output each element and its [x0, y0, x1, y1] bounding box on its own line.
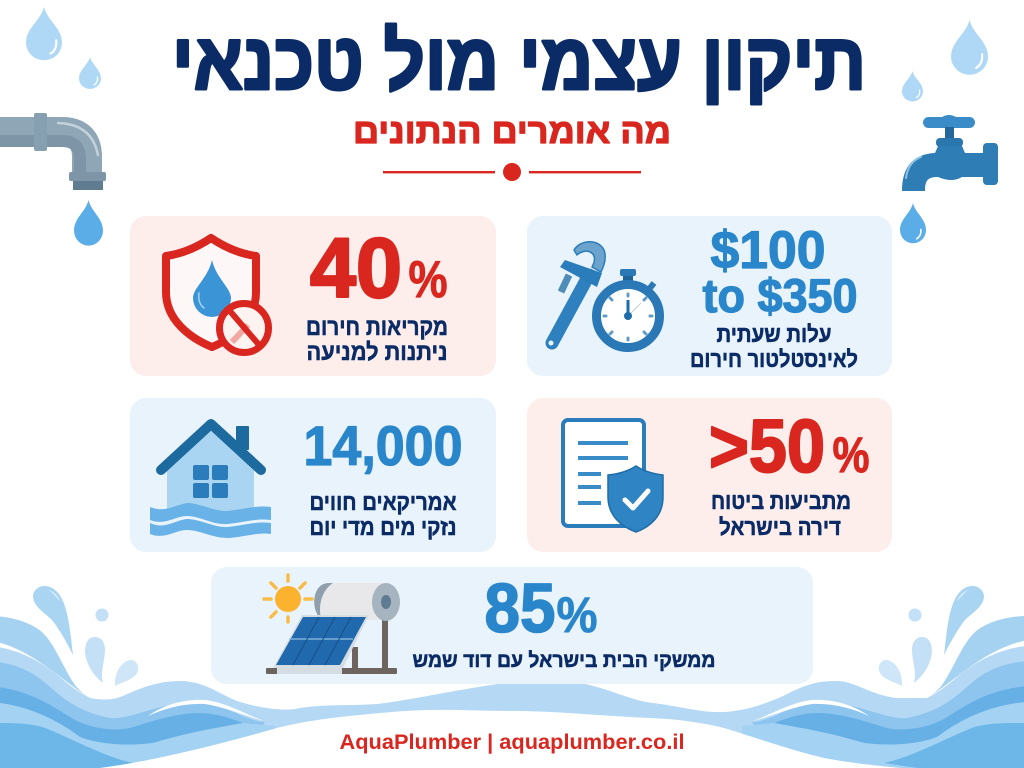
panel: 40% preventable emergency calls — [130, 216, 496, 376]
water waves and splash: right side — [717, 586, 1024, 768]
icon: flooded house — [150, 424, 271, 538]
icon: blue drop left — [74, 200, 103, 246]
icon: small drop left — [79, 57, 101, 89]
icon: shield with drop and prohibition sign — [166, 238, 268, 352]
icon: large drop left — [26, 7, 62, 60]
stat: 14,000: 14,000 — [304, 414, 462, 477]
stat: 40%: 40 — [310, 221, 402, 315]
stat: 40%: % — [408, 251, 448, 309]
label: preventable emergency calls — [306, 314, 448, 366]
stat: 85%: 85 — [484, 569, 556, 647]
label: preventable emergency calls: מקריאות חירום — [306, 314, 448, 341]
label: preventable emergency calls: ניתנות למניעה — [306, 339, 448, 366]
icon: blue drop right — [900, 203, 926, 243]
label: households in Israel with solar heater: ממשקי הבית בישראל עם דוד שמש — [412, 649, 716, 672]
panel: hourly cost of emergency plumber — [527, 216, 892, 376]
icon: small drop right — [902, 71, 923, 101]
subtitle: מה אומרים הנתונים — [353, 112, 671, 151]
water waves and splash: left side — [0, 586, 300, 768]
icon: document with check shield — [563, 420, 663, 532]
panel: 85% of households with solar heater — [211, 567, 813, 684]
icon: pipe wrench and stopwatch — [548, 242, 660, 348]
stat: $100 to $350: $100 — [710, 221, 826, 280]
water wave: centre band — [90, 680, 930, 768]
icon: large drop right — [951, 20, 988, 75]
label: Americans experience water damage daily: אמריקאים חווים — [310, 489, 457, 515]
label: Americans experience water damage daily — [310, 489, 457, 540]
stat: $100 to $350: to $350 — [702, 269, 858, 322]
label: hourly emergency plumber cost — [690, 321, 858, 372]
label: home insurance claims in Israel: מתביעות ביטוח — [711, 488, 851, 514]
stat: $100 to $350 — [702, 221, 858, 322]
stat: 40% — [310, 221, 448, 315]
icon: sun — [264, 575, 312, 622]
label: hourly emergency plumber cost: עלות שעתית — [716, 321, 832, 347]
label: home insurance claims in Israel — [711, 488, 851, 540]
footer brand: AquaPlumber | aquaplumber.co.il — [340, 731, 684, 754]
label: Americans experience water damage daily: נזקי מים מדי יום — [310, 514, 456, 540]
title: תיקון עצמי מול טכנאי — [172, 17, 866, 106]
stat: >50%: % — [832, 427, 870, 483]
white wave dome — [100, 710, 901, 768]
icon: grey pipe — [0, 113, 106, 190]
label: hourly emergency plumber cost: לאינסטלטור חירום — [690, 346, 858, 372]
panel: over 50% of home insurance claims — [527, 398, 892, 552]
stat: 85%: % — [556, 587, 598, 643]
stat: 85% — [484, 569, 598, 647]
panel: 14,000 Americans daily water damage — [130, 398, 496, 552]
icon: solar water heater — [266, 583, 400, 674]
label: home insurance claims in Israel: דירה בישראל — [719, 514, 841, 540]
divider with dot — [383, 163, 641, 181]
icon: blue faucet — [902, 115, 998, 191]
stat: >50%: >50 — [709, 404, 825, 488]
